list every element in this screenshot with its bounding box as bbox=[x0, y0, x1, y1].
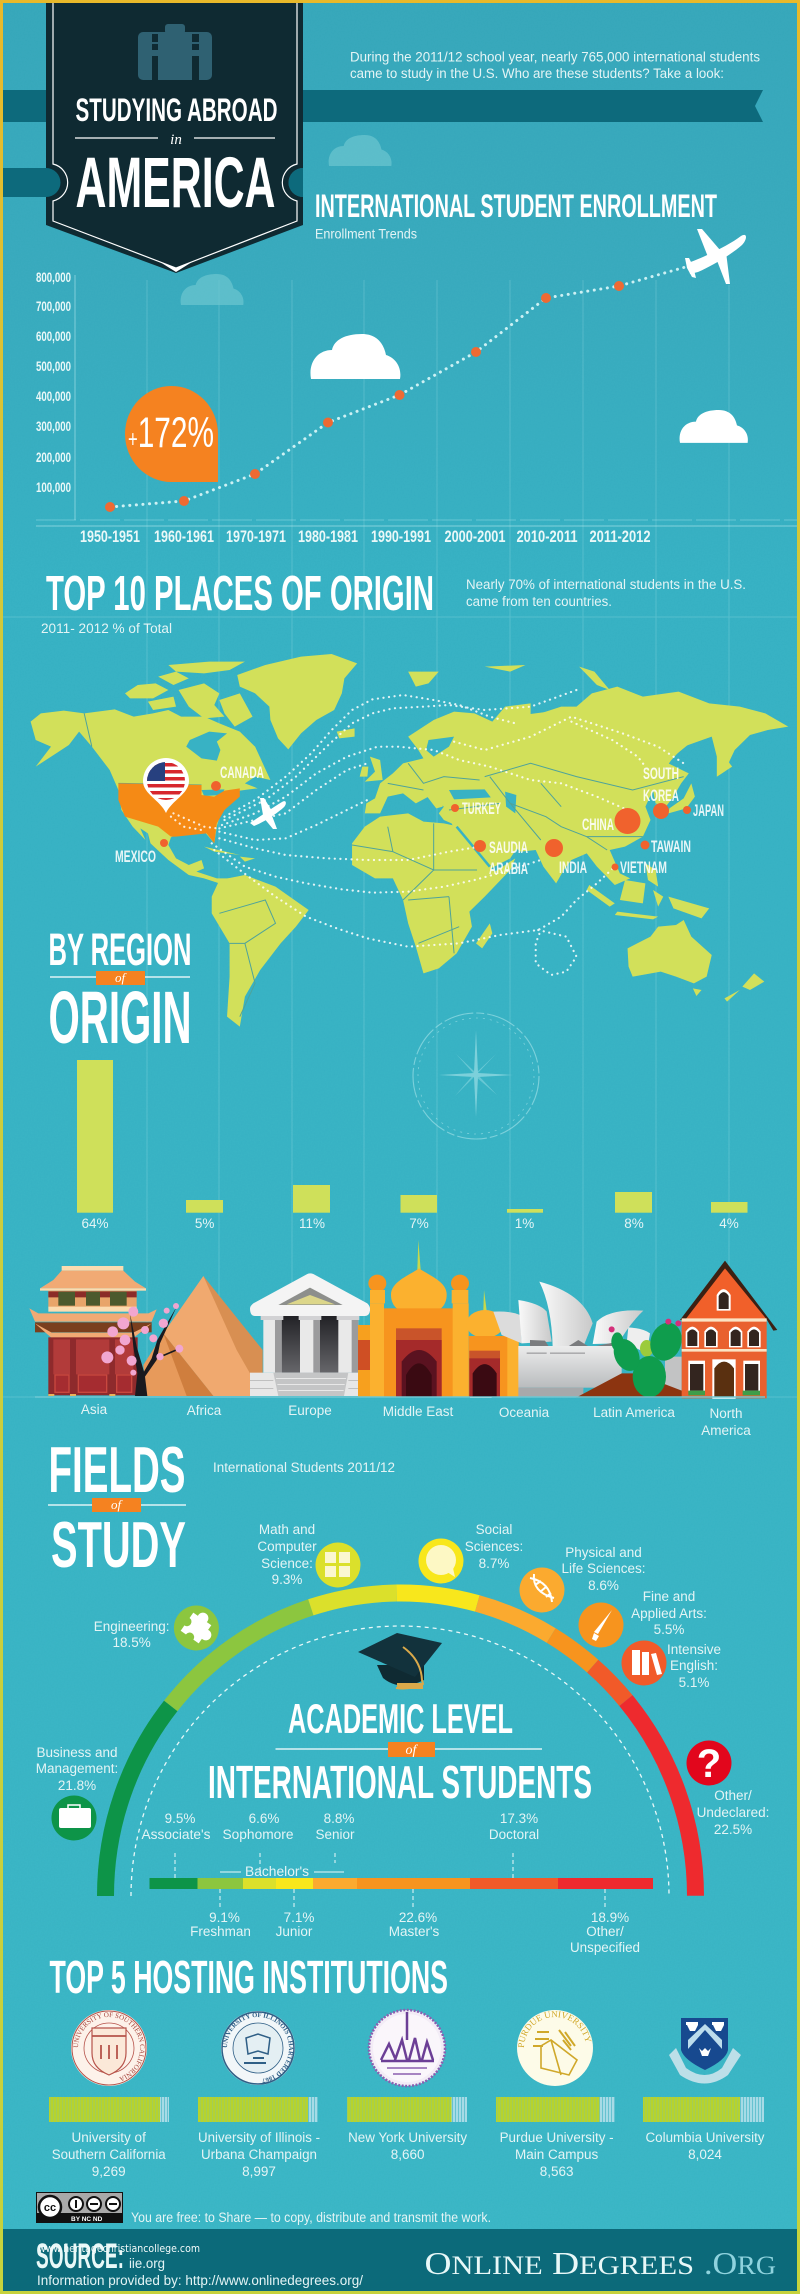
y axis labels: 400,000 bbox=[36, 389, 71, 404]
intro text: came to study in the U.S. Who are these students? Take a look: bbox=[350, 66, 724, 81]
region labels bbox=[81, 1402, 751, 1438]
x axis years: 1980-1981 bbox=[298, 527, 358, 546]
field: math and computer science: Computer bbox=[257, 1539, 317, 1554]
map: north america bbox=[31, 709, 270, 883]
field: business and management: Business and bbox=[36, 1745, 118, 1760]
illustration: north american house bbox=[680, 1261, 777, 1399]
heading: fields of study: FIELDS bbox=[48, 1433, 186, 1506]
region labels: Europe bbox=[288, 1403, 332, 1418]
icon: airplane bbox=[685, 229, 746, 284]
footer band bbox=[0, 2229, 800, 2294]
academic level labels: Unspecified bbox=[570, 1940, 640, 1955]
heading: by region of origin: ORIGIN bbox=[48, 976, 192, 1059]
logo: online degrees: .ORG bbox=[704, 2245, 776, 2281]
x axis years: 1960-1961 bbox=[154, 527, 214, 546]
institution labels: 8,563 bbox=[540, 2164, 573, 2179]
x axis years: 2010-2011 bbox=[516, 527, 578, 546]
field: business and management: 21.8% bbox=[58, 1778, 96, 1793]
clouds bbox=[181, 135, 748, 443]
country labels: MEXICO bbox=[115, 848, 156, 866]
field: social sciences: 8.7% bbox=[479, 1556, 509, 1571]
heading: fields of study bbox=[48, 1433, 186, 1581]
field: social sciences bbox=[418, 1522, 523, 1584]
trend line bbox=[110, 266, 689, 507]
heading: fields of study: of bbox=[111, 1497, 123, 1512]
x axis years bbox=[80, 527, 650, 546]
country labels: ARABIA bbox=[489, 860, 528, 878]
field: business and management: Management: bbox=[36, 1761, 118, 1776]
institution labels: Columbia University bbox=[646, 2130, 765, 2145]
title divider: in: in bbox=[170, 132, 182, 148]
map: africa bbox=[352, 813, 515, 973]
map: inland seas bbox=[186, 732, 516, 813]
institution bars bbox=[49, 2097, 764, 2122]
y axis labels: 500,000 bbox=[36, 359, 71, 374]
region labels: Latin America bbox=[593, 1405, 675, 1420]
icon: small airplane bbox=[250, 798, 286, 829]
field: math and computer science: 9.3% bbox=[272, 1572, 302, 1587]
icon: graduation cap bbox=[358, 1633, 442, 1689]
callout: +172% bbox=[125, 386, 218, 482]
callout: +172%: +172% bbox=[128, 409, 214, 457]
title: Studying Abroad: STUDYING ABROAD bbox=[76, 92, 278, 128]
map: australia bbox=[628, 920, 712, 983]
illustration: pyramid bbox=[143, 1276, 263, 1396]
country labels: SOUTH bbox=[643, 765, 679, 783]
top 10 description: Nearly 70% of international students in the U.S. bbox=[466, 577, 746, 592]
heading: fields of study: STUDY bbox=[51, 1508, 186, 1581]
y axis labels: 100,000 bbox=[36, 480, 71, 495]
blossom tree bbox=[101, 1303, 183, 1396]
semicircle chart: fields of study bbox=[106, 1593, 696, 1896]
academic level labels bbox=[142, 1811, 640, 1955]
heading: academic level of international students: ACADEMIC LEVEL bbox=[288, 1695, 513, 1742]
illustration: cactus bbox=[576, 1319, 700, 1398]
logo: online degrees: ONLINE DEGREES bbox=[424, 2245, 694, 2281]
field: social sciences: Sciences: bbox=[465, 1539, 523, 1554]
map: flight routes bbox=[171, 690, 684, 975]
institution labels: Southern California bbox=[52, 2147, 166, 2162]
bar values: 8% bbox=[624, 1216, 644, 1231]
field: other undeclared: Other/ bbox=[714, 1788, 752, 1803]
illustration: mosque bbox=[358, 1240, 520, 1397]
academic level labels: Senior bbox=[315, 1827, 355, 1842]
field: engineering: 18.5% bbox=[112, 1635, 151, 1650]
bar values: 5% bbox=[195, 1216, 214, 1231]
country labels: CHINA bbox=[582, 816, 614, 834]
seal: university of illinois: UNIVERSITY OF ILLINOIS CHARTERED 1867 bbox=[222, 2012, 294, 2083]
country labels: TURKEY bbox=[462, 800, 501, 818]
country labels: JAPAN bbox=[693, 802, 724, 820]
institution labels: 8,024 bbox=[688, 2147, 722, 2162]
field: fine and applied arts: Fine and bbox=[643, 1589, 695, 1604]
country labels: KOREA bbox=[643, 787, 679, 805]
institution labels: Main Campus bbox=[515, 2147, 598, 2162]
academic level labels: 7.1% bbox=[284, 1910, 314, 1925]
top 10 description bbox=[466, 577, 746, 609]
bar values: 64% bbox=[81, 1216, 109, 1231]
origin bubbles bbox=[160, 781, 691, 870]
creative commons badge bbox=[36, 2192, 123, 2223]
field: intensive english: 5.1% bbox=[679, 1675, 709, 1690]
illustration: sydney opera house bbox=[470, 1282, 682, 1398]
y axis labels: 600,000 bbox=[36, 329, 71, 344]
field: engineering bbox=[94, 1605, 220, 1651]
heading: top 10 places of origin: TOP 10 PLACES OF ORIGIN bbox=[46, 567, 434, 621]
intro text bbox=[350, 50, 760, 81]
academic level labels: 22.6% bbox=[399, 1910, 437, 1925]
subheading: enrollment trends: Enrollment Trends bbox=[315, 226, 417, 242]
country labels: TAWAIN bbox=[651, 838, 691, 856]
x axis years: 1950-1951 bbox=[80, 527, 140, 546]
institution labels: 9,269 bbox=[92, 2164, 126, 2179]
region labels: Africa bbox=[187, 1403, 222, 1418]
field: other undeclared bbox=[686, 1740, 769, 1837]
region labels: Oceania bbox=[499, 1405, 550, 1420]
title: America: AMERICA bbox=[76, 144, 276, 223]
icon: US flag pin bbox=[143, 758, 189, 813]
institution labels: 8,660 bbox=[391, 2147, 424, 2162]
seal: purdue university: PURDUE UNIVERSITY bbox=[518, 2011, 592, 2048]
x axis years: 2011-2012 bbox=[590, 527, 650, 546]
academic level labels: 18.9% bbox=[591, 1910, 629, 1925]
intro text: During the 2011/12 school year, nearly 765,000 international students bbox=[350, 50, 760, 64]
top 10 description: came from ten countries. bbox=[466, 594, 612, 609]
stacked bar: academic level bbox=[150, 1878, 653, 1889]
field: fine and applied arts: 5.5% bbox=[654, 1622, 684, 1637]
bar chart: by region bbox=[77, 1060, 748, 1231]
license text: You are free: to Share — to copy, distribute and transmit the work. bbox=[131, 2210, 491, 2225]
line chart: enrollment bbox=[36, 266, 797, 546]
field: math and computer science: Science: bbox=[261, 1556, 313, 1571]
x axis years: 1990-1991 bbox=[371, 527, 431, 546]
region labels: North bbox=[709, 1406, 743, 1421]
institution labels: New York University bbox=[348, 2130, 467, 2145]
field: social sciences: Social bbox=[476, 1522, 512, 1537]
source heading: SOURCE: bbox=[36, 2237, 124, 2276]
creative commons badge: BY NC ND bbox=[71, 2216, 103, 2223]
x axis years: 2000-2001 bbox=[444, 527, 506, 546]
heading: by region of origin bbox=[48, 924, 192, 1059]
region labels: Asia bbox=[81, 1402, 108, 1417]
heading: academic level of international students: of bbox=[406, 1743, 419, 1758]
field: engineering: Engineering: bbox=[94, 1619, 170, 1634]
field: fine and applied arts: Applied Arts: bbox=[631, 1606, 707, 1621]
country labels bbox=[115, 764, 724, 878]
data points bbox=[105, 281, 624, 512]
credit: Information provided by: http://www.onlinedegrees.org/ bbox=[37, 2273, 363, 2288]
country labels: VIETNAM bbox=[620, 859, 667, 877]
field: physical and life sciences: 8.6% bbox=[588, 1578, 619, 1593]
institution labels: University of Illinois - bbox=[198, 2130, 320, 2145]
heading: academic level of international students bbox=[208, 1695, 592, 1808]
icon: suitcase bbox=[138, 24, 212, 80]
academic level labels: Master's bbox=[389, 1924, 440, 1939]
world map bbox=[31, 654, 788, 1027]
institution labels: University of bbox=[72, 2130, 146, 2145]
academic level labels: 6.6% bbox=[249, 1811, 279, 1826]
country labels: INDIA bbox=[559, 859, 587, 877]
field: intensive english: Intensive bbox=[667, 1642, 721, 1657]
y axis labels: 800,000 bbox=[36, 270, 71, 285]
institution labels bbox=[52, 2130, 765, 2179]
y axis labels: 700,000 bbox=[36, 299, 71, 314]
academic level labels: 17.3% bbox=[500, 1811, 538, 1826]
field: physical and life sciences bbox=[520, 1545, 646, 1612]
source: iie.org: iie.org bbox=[129, 2256, 165, 2271]
illustration: pagoda and blossom tree bbox=[29, 1266, 183, 1396]
subheading: international students 2011/12: International Students 2011/12 bbox=[213, 1460, 395, 1475]
bar values bbox=[81, 1216, 739, 1231]
field: other undeclared: 22.5% bbox=[714, 1822, 752, 1837]
field: other undeclared: ? bbox=[697, 1742, 721, 1786]
field: physical and life sciences: Physical and bbox=[565, 1545, 642, 1560]
institution labels: Urbana Champaign bbox=[201, 2147, 317, 2162]
header ribbons bbox=[3, 90, 763, 197]
academic level labels: Doctoral bbox=[489, 1827, 539, 1842]
map: borders bbox=[84, 713, 684, 1017]
academic level labels: Freshman bbox=[190, 1924, 251, 1939]
academic level labels: 9.5% bbox=[165, 1811, 195, 1826]
institution labels: Purdue University - bbox=[500, 2130, 614, 2145]
region labels: Middle East bbox=[383, 1404, 454, 1419]
y axis labels bbox=[36, 270, 71, 495]
academic level labels: 9.1% bbox=[209, 1910, 240, 1925]
region labels: America bbox=[701, 1423, 751, 1438]
country labels: SAUDIA bbox=[489, 839, 528, 857]
seal: university of southern california: UNIVERSITY OF SOUTHERN CALIFORNIA bbox=[73, 2012, 145, 2081]
bar values: 7% bbox=[409, 1216, 429, 1231]
field: math and computer science bbox=[257, 1522, 360, 1588]
map: greenland bbox=[237, 654, 357, 749]
field: physical and life sciences: Life Sciences: bbox=[561, 1561, 646, 1576]
heading: by region of origin: BY REGION bbox=[48, 924, 192, 975]
source url: www.heritagechristiancollege.com bbox=[38, 2243, 200, 2255]
field: fine and applied arts bbox=[578, 1589, 707, 1648]
seal: new york university bbox=[369, 2010, 445, 2086]
seal: purdue university bbox=[517, 2010, 593, 2086]
map: asia pacific islands bbox=[587, 753, 732, 919]
field labels and icons bbox=[36, 1522, 769, 1840]
creative commons badge: cc bbox=[44, 2202, 56, 2214]
map: red sea bbox=[457, 827, 490, 867]
field: math and computer science: Math and bbox=[259, 1522, 315, 1537]
y axis labels: 200,000 bbox=[36, 450, 71, 465]
bar values: 11% bbox=[299, 1216, 325, 1231]
y axis labels: 300,000 bbox=[36, 419, 71, 434]
heading: by region of origin: of bbox=[115, 970, 127, 985]
title badge bbox=[46, 3, 303, 273]
map: united states bbox=[118, 783, 240, 843]
x axis years: 1970-1971 bbox=[226, 527, 286, 546]
map: eurasia bbox=[365, 687, 788, 885]
bar values: 1% bbox=[515, 1216, 534, 1231]
institution labels: 8,997 bbox=[242, 2164, 276, 2179]
heading: top 5 hosting institutions: TOP 5 HOSTING INSTITUTIONS bbox=[50, 1951, 448, 2003]
academic level labels: Sophomore bbox=[222, 1827, 294, 1842]
academic level labels: Bachelor's bbox=[245, 1864, 309, 1879]
illustration: greek temple bbox=[250, 1273, 372, 1396]
country labels: CANADA bbox=[220, 764, 264, 782]
academic level labels: Associate's bbox=[142, 1827, 211, 1842]
academic level labels: Other/ bbox=[586, 1924, 624, 1939]
field: other undeclared: Undeclared: bbox=[697, 1805, 769, 1820]
subheading: % of total: 2011- 2012 % of Total bbox=[41, 621, 172, 636]
field: intensive english: English: bbox=[670, 1658, 718, 1673]
academic level labels: 8.8% bbox=[324, 1811, 354, 1826]
field: business and management bbox=[36, 1745, 118, 1840]
compass bbox=[413, 1013, 539, 1139]
bar values: 4% bbox=[719, 1216, 739, 1231]
academic level labels: Junior bbox=[276, 1924, 313, 1939]
field: intensive english bbox=[622, 1640, 721, 1690]
map: south america bbox=[212, 875, 309, 1027]
seal: columbia university bbox=[669, 2018, 741, 2084]
